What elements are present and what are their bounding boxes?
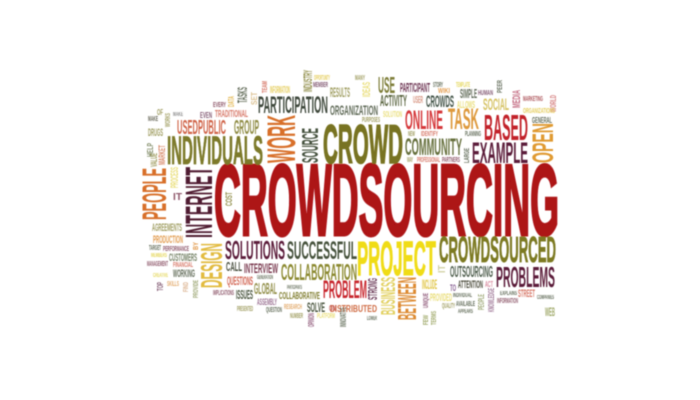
word cloud: SOLVE: [307, 299, 325, 315]
word cloud: ACTIVITY: [380, 93, 407, 110]
small words: PLATFORM: [317, 313, 335, 320]
small words: QUESTION: [266, 307, 282, 314]
small words: FINANCIAL: [173, 262, 193, 269]
small words: ON: [329, 304, 336, 313]
small words: IDENTIFY: [421, 131, 438, 138]
small words: COST: [224, 192, 234, 206]
word cloud: DESIGN: [194, 243, 229, 288]
word cloud: WEB: [545, 305, 555, 319]
word cloud: COLLABORATIVE: [279, 291, 320, 302]
small words: TRADITIONAL: [215, 109, 248, 120]
small words: EVEN: [200, 111, 212, 120]
word cloud: SOCIAL: [483, 95, 509, 114]
word cloud: PROBLEM: [323, 276, 367, 304]
word cloud: INCLUDE: [422, 276, 437, 292]
word cloud: SOLUTIONS: [225, 235, 285, 265]
small words: TEAM: [262, 81, 269, 93]
small words: LARGE: [464, 148, 471, 163]
word cloud: CROWDS: [426, 92, 454, 111]
small words: MARKETING: [523, 96, 543, 103]
small words: WAY: [407, 157, 413, 164]
word cloud: INDIVIDUALS: [167, 129, 263, 173]
small words: QUALITY: [442, 303, 455, 310]
small words: PROVIDED: [430, 292, 452, 304]
small words: INNOVATIVE: [339, 307, 348, 327]
word cloud: SOURCE: [297, 128, 323, 163]
small words: COMPANIES: [537, 295, 554, 301]
small words: WORLD: [549, 95, 558, 112]
small words: STORY: [433, 82, 443, 89]
small words: TARGET: [149, 245, 161, 252]
small words: KNOWLEDGE: [487, 288, 496, 312]
small words: TERMS: [431, 311, 438, 325]
word cloud: COMMUNITY: [405, 134, 462, 161]
small words: UNIQUE: [423, 293, 430, 308]
small words: HELP: [146, 143, 155, 157]
small words: MARKET: [157, 145, 167, 165]
small words: CUSTOMERS: [169, 252, 197, 264]
small words: PERFORMANCE: [163, 246, 189, 253]
word cloud: BASED: [484, 107, 528, 148]
word cloud: PROBLEMS: [496, 262, 555, 294]
small words: TASKS: [234, 87, 250, 103]
small words: PROVIDE: [193, 280, 200, 298]
word cloud: GROUP: [234, 117, 259, 139]
small words: NUMBER: [290, 313, 303, 320]
small words: SOLUTION: [383, 110, 402, 119]
small words: ACT: [485, 280, 493, 289]
word cloud: STRONG: [365, 278, 380, 300]
small words: MEMBERS: [151, 253, 167, 259]
word cloud: USE: [378, 72, 395, 98]
small words: PROCESS: [169, 167, 181, 188]
small words: PROFESSIONAL: [417, 157, 440, 164]
small words: MAKE: [148, 116, 158, 123]
small words: GENERAL: [532, 116, 552, 125]
word cloud: TASK: [448, 103, 479, 136]
small words: HUMAN: [478, 90, 493, 97]
word cloud: SUCCESSFUL: [287, 237, 357, 265]
small words: SKILLS: [167, 281, 179, 288]
small words: VALUE: [149, 153, 159, 167]
small words: RESULTS: [330, 84, 350, 100]
small words: CREATIVE: [153, 273, 168, 279]
small words: NEW: [408, 131, 415, 138]
small words: MEMBER: [313, 82, 328, 89]
small words: FIND: [183, 282, 190, 292]
word cloud: BETWEEN: [392, 277, 422, 320]
word cloud: PARTICIPANT: [400, 80, 430, 95]
small words: PEOPLE: [477, 294, 486, 310]
small words: ORGANIZATION: [330, 102, 378, 118]
word cloud: OPEN: [527, 123, 560, 163]
small words: BY: [193, 242, 200, 250]
small words: INDIVIDUAL: [453, 293, 472, 299]
word cloud: ATTENTION: [458, 279, 483, 291]
word cloud: EXAMPLE: [472, 137, 528, 170]
word cloud: USEDPUBLIC: [177, 117, 226, 139]
word cloud: ONLINE: [405, 105, 443, 135]
small words: OF: [157, 108, 163, 117]
word cloud: INTERVIEW: [244, 260, 278, 276]
word: distributed: DISTRIBUTED: [330, 304, 377, 315]
small words: [146, 70, 558, 327]
small words: PURPOSES: [362, 117, 380, 124]
word cloud: GLOBAL: [254, 281, 277, 298]
small words: SIMPLE: [460, 86, 477, 101]
small words: PLANNING: [465, 131, 481, 138]
small words: RESEARCH: [284, 304, 302, 311]
small words: OPINION: [307, 313, 316, 327]
small words: IT: [437, 265, 448, 273]
small words: PARTNERS: [442, 157, 460, 164]
small words: STREET: [518, 288, 535, 300]
word cloud: CROWD: [323, 113, 403, 175]
small words: AGREEMENTS: [152, 222, 182, 234]
word cloud: QUESTIONS: [227, 274, 253, 288]
small words: EVERY: [213, 102, 226, 109]
small words: MANY: [355, 75, 365, 82]
small words: PRESENTED: [237, 306, 253, 313]
small words: WORKING: [173, 268, 195, 280]
small words: LOWER: [367, 316, 377, 322]
small words: DATA: [227, 96, 236, 107]
small words: ALLOWS: [457, 100, 475, 111]
small words: MEDIA: [511, 90, 523, 108]
small words: EXPLAINS: [500, 291, 517, 297]
small words: AVAILABLE: [456, 301, 475, 308]
word cloud: INDUSTRY: [301, 70, 315, 92]
word cloud: PEOPLE: [136, 168, 174, 220]
word cloud: CALL: [226, 259, 242, 274]
small words: PRODUCTION: [153, 234, 183, 246]
small words: TOP: [156, 282, 165, 291]
word cloud: WORK: [260, 115, 304, 163]
small words: ASSEMBLY: [257, 297, 277, 307]
small words: IDEAS: [361, 82, 373, 97]
small words: PEER: [497, 80, 504, 93]
small words: PARTICIPANTS: [287, 285, 302, 291]
small words: USER: [413, 95, 423, 106]
small words: ORGANIZATIONS: [523, 108, 555, 115]
small words: FEW: [423, 315, 430, 325]
small words: IT: [173, 192, 182, 203]
small words: DRUGS: [148, 127, 163, 139]
small words: TO: [450, 283, 456, 293]
small words: APPEARS: [458, 309, 473, 315]
small words: GENERATION: [257, 275, 273, 281]
small words: IMPLICATIONS: [213, 290, 234, 297]
word cloud: BUSINESS: [378, 277, 400, 315]
word cloud: PROJECT: [357, 233, 436, 286]
word cloud: INTERNET: [179, 167, 221, 238]
small words: TEMPLATE: [456, 82, 470, 89]
word cloud: PARTICIPATION: [258, 92, 328, 119]
word cloud: ISSUES: [236, 287, 253, 302]
word cloud: OUTSOURCING: [450, 264, 493, 281]
small words: INFORMATION: [270, 85, 290, 96]
small words: SET: [250, 92, 259, 105]
word cloud: COLLABORATION: [281, 259, 357, 285]
small words: INFORMATION: [497, 298, 518, 305]
small words: MANAGEMENT: [147, 261, 168, 268]
small words: WIKI: [438, 88, 450, 95]
small words: MAKE: [173, 112, 183, 118]
small words: WORKS: [165, 113, 172, 127]
small words: OPPORTUNITY: [314, 75, 330, 82]
